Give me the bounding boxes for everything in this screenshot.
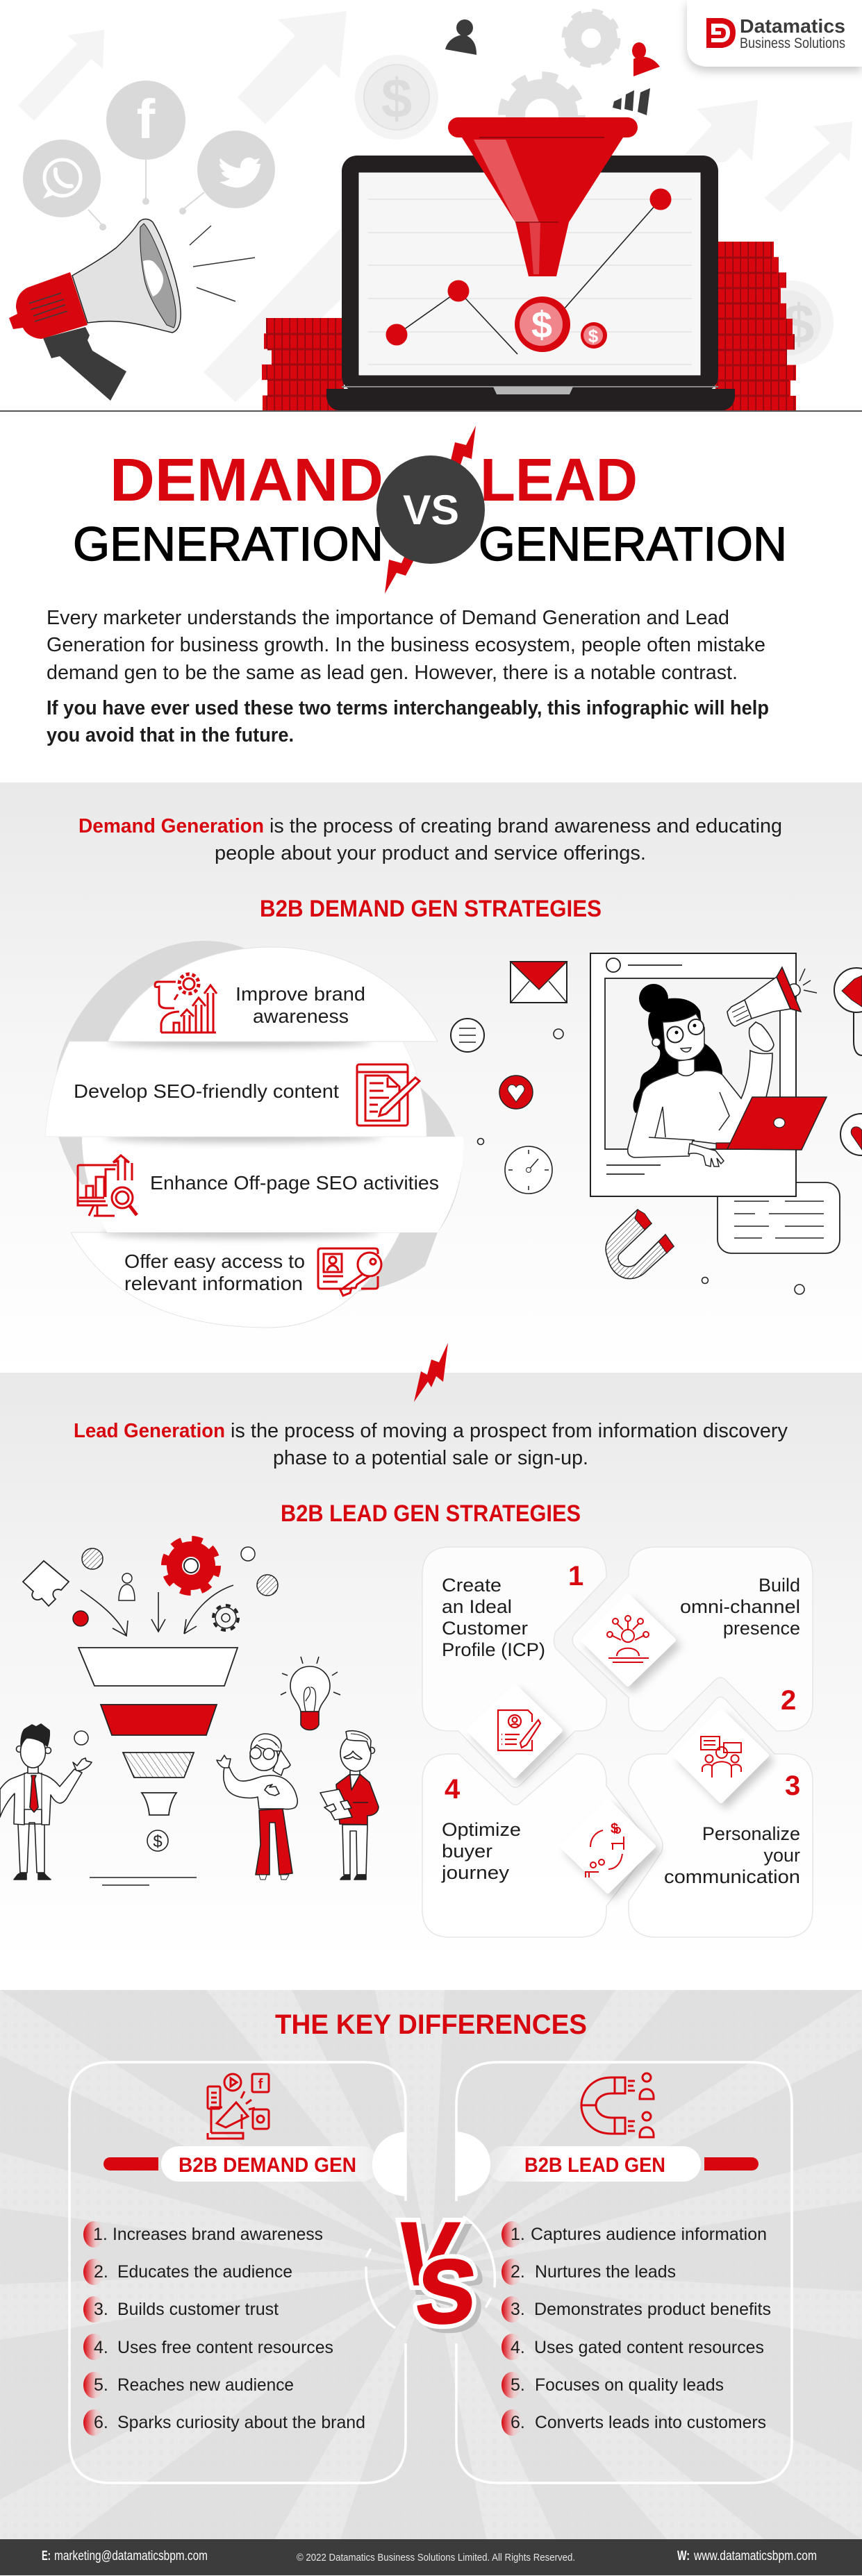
strategy 3 (78, 1132, 463, 1232)
icon: megaphone (9, 219, 255, 401)
icon: heart circle (499, 1076, 533, 1109)
heading: generation left: GENERATION (73, 517, 383, 571)
footer: E: (42, 2549, 51, 2564)
social post illustration (590, 953, 827, 1196)
heading: lead: LEAD (480, 446, 638, 514)
hero illustration (0, 11, 862, 412)
definition text: people about your product and service offerings. (215, 842, 646, 864)
lightning bolt (385, 426, 476, 594)
social icon: facebook (106, 81, 185, 205)
heading: THE KEY DIFFERENCES (275, 2009, 587, 2040)
item 1 (83, 2221, 323, 2248)
funnel illustration (0, 1539, 379, 1885)
item 3: Demonstrates product benefits (534, 2300, 771, 2319)
logo badge (687, 0, 862, 67)
item 1: Increases brand awareness (113, 2225, 323, 2244)
vs emblem: S (417, 2245, 486, 2347)
icon: logo mark (706, 18, 736, 48)
icon: menu circle (451, 1019, 484, 1052)
label pill: B2B DEMAND GEN (179, 2154, 356, 2177)
line chart on laptop (386, 189, 671, 354)
card 2 (572, 1547, 813, 1731)
dollar coin (147, 1830, 168, 1851)
light bulb (281, 1657, 340, 1730)
strategy 4: Offer easy access to (124, 1251, 305, 1272)
item 6: 6. (94, 2413, 108, 2432)
diamond: team chat icon (675, 1711, 767, 1801)
character: woman with megaphone (628, 984, 772, 1166)
strategy 4 (71, 1228, 400, 1328)
laptop (326, 156, 735, 410)
item 1: Captures audience information (531, 2225, 767, 2244)
heading: generation right: GENERATION (479, 517, 787, 571)
strategy 4: relevant information (124, 1273, 303, 1294)
strategy 2: Develop SEO-friendly content (74, 1080, 339, 1102)
big dollar coin (515, 296, 570, 352)
card 3: 3 (785, 1771, 800, 1801)
item 4: Uses gated content resources (534, 2338, 764, 2357)
title block (73, 426, 787, 594)
panel: key differences (0, 1990, 862, 2539)
intro paragraph: demand gen to be the same as lead gen. However, there is a notable contrast. (47, 662, 738, 684)
card 4: journey (441, 1862, 510, 1883)
diamond: network icon (583, 1596, 674, 1684)
item 2: 2. (511, 2262, 525, 2282)
intro paragraph: you avoid that in the future. (47, 724, 294, 746)
vs emblem: S (412, 2241, 481, 2342)
funnel layers (78, 1648, 238, 1815)
strategy 1 (108, 947, 438, 1042)
card 3: communication (664, 1866, 800, 1887)
item 1 (502, 2221, 767, 2248)
item 4 (83, 2334, 333, 2360)
half circle (456, 2132, 490, 2196)
character: old man with clipboard (320, 1731, 379, 1880)
card 1: an Ideal (442, 1596, 512, 1617)
big dollar coin: $ (531, 304, 552, 346)
item 3: 3. (511, 2300, 525, 2319)
vs badge (376, 455, 485, 564)
social icon: facebook: f (137, 88, 156, 150)
item 3 (83, 2296, 279, 2323)
icon: lead magnet (581, 2073, 654, 2137)
strategy cards (422, 1547, 813, 1937)
card 2: presence (723, 1618, 800, 1639)
pale dollar coins (355, 55, 834, 365)
card 2: omni-channel (680, 1596, 800, 1617)
footer (0, 2539, 862, 2575)
item 1: 1. (93, 2225, 108, 2244)
intro paragraph (47, 607, 769, 746)
strategy 2 (45, 1037, 426, 1137)
gears (503, 12, 618, 154)
item 4: 4. (94, 2338, 108, 2357)
definition text (74, 1420, 788, 1469)
item 5: 5. (94, 2375, 108, 2395)
note box (718, 1182, 840, 1253)
icon: red gear (165, 1539, 217, 1592)
vs badge: VS (403, 487, 459, 533)
strategy 1: awareness (253, 1005, 349, 1027)
card 1: Profile (ICP) (442, 1639, 545, 1660)
vs emblem: V (389, 2205, 463, 2304)
pale dollar coins: $ (381, 67, 412, 129)
puzzle piece (23, 1561, 69, 1606)
vs emblem (366, 2205, 495, 2347)
item 6: Sparks curiosity about the brand (117, 2413, 365, 2432)
small dollar coin (581, 322, 607, 349)
icon: brand awareness (155, 974, 217, 1032)
intro paragraph: If you have ever used these two terms interchangeably, this infographic will help (47, 697, 769, 719)
icon: digital marketing (208, 2074, 269, 2139)
item 4: Uses free content resources (117, 2338, 333, 2357)
column: demand gen (69, 2062, 406, 2483)
item 6 (502, 2409, 766, 2436)
card 3: Personalize (702, 1823, 800, 1844)
definition text: phase to a potential sale or sign-up. (273, 1447, 588, 1469)
icon: clock (505, 1146, 552, 1194)
strategy 3: Enhance Off-page SEO activities (150, 1172, 439, 1194)
red laptop (716, 1097, 827, 1150)
item 5 (502, 2372, 724, 2398)
card 4: Optimize (442, 1819, 521, 1840)
right edge icons (834, 968, 862, 1155)
item 4: 4. (511, 2338, 525, 2357)
footer: W: (677, 2549, 690, 2564)
coin stack right (715, 242, 796, 411)
card 1 (422, 1547, 606, 1787)
strategy 1: Improve brand (235, 983, 365, 1005)
small person (119, 1573, 135, 1600)
definition text: is the process of moving a prospect from information discovery (231, 1420, 788, 1442)
label pill (103, 2146, 379, 2182)
list: demand items (83, 2221, 365, 2436)
arrows into funnel (81, 1585, 233, 1636)
card 4: buyer (442, 1841, 492, 1862)
dollar coin: $ (153, 1832, 163, 1851)
intro paragraph: Generation for business growth. In the business ecosystem, people often mistake (47, 634, 765, 656)
logo badge: Datamatics (740, 15, 845, 37)
item 1: 1. (511, 2225, 525, 2244)
icon: person dark (445, 19, 476, 55)
list: lead items (502, 2221, 771, 2436)
item 6 (83, 2409, 365, 2436)
definition text: is the process of creating brand awareness and educating (270, 815, 782, 837)
pale dollar coins: $ (784, 293, 814, 355)
icon: seo content (357, 1064, 420, 1126)
social icon: twitter (179, 131, 275, 215)
coin stack left (262, 318, 344, 411)
item 3: Builds customer trust (117, 2300, 279, 2319)
funnel (448, 117, 638, 276)
diamond: buyer journey icon (562, 1801, 654, 1891)
small dollar coin: $ (588, 326, 599, 346)
definition text: Lead Generation (74, 1420, 225, 1442)
background rays (0, 1990, 862, 2539)
heading: demand: DEMAND (110, 446, 383, 514)
card 2: 2 (781, 1685, 796, 1716)
card 2: Build (759, 1575, 800, 1596)
baseline (0, 410, 862, 412)
lightning bolt (414, 1343, 448, 1402)
card 1: Create (442, 1575, 502, 1596)
footer: © 2022 Datamatics Business Solutions Limited. All Rights Reserved. (297, 2552, 575, 2564)
item 3: 3. (94, 2300, 108, 2319)
item 3 (502, 2296, 771, 2323)
definition text: Demand Generation (78, 815, 264, 837)
diamond: buyer journey icon: $ (611, 1821, 618, 1837)
item 2: 2. (94, 2262, 108, 2282)
item 2 (83, 2259, 292, 2285)
icon: magnet (606, 1210, 674, 1279)
strategy stack (45, 941, 463, 1328)
footer: marketing@datamaticsbpm.com (54, 2549, 208, 2564)
card 4 (422, 1754, 649, 1937)
item 6: Converts leads into customers (535, 2413, 766, 2432)
icon: id key (318, 1248, 381, 1296)
logo badge: Business Solutions (740, 35, 845, 51)
decor circles (73, 1547, 278, 1745)
footer: www.datamaticsbpm.com (693, 2549, 817, 2564)
item 2: Nurtures the leads (535, 2262, 676, 2282)
small gear (213, 1605, 238, 1630)
card 3: your (763, 1845, 800, 1866)
social icon: whatsapp (23, 140, 106, 231)
icon: bars (613, 88, 650, 115)
label pill (486, 2146, 759, 2182)
card 4: 4 (445, 1774, 461, 1805)
diamond: profile icon (469, 1686, 561, 1776)
background arrows (18, 11, 852, 402)
item 5: Focuses on quality leads (535, 2375, 724, 2395)
item 5 (83, 2372, 294, 2398)
vs emblem: V (395, 2210, 468, 2309)
card 1: 1 (568, 1561, 583, 1591)
item 5: Reaches new audience (117, 2375, 294, 2395)
item 4 (502, 2334, 764, 2360)
icon: person red (632, 42, 660, 76)
vs emblem: S (412, 2241, 481, 2342)
card 3 (629, 1697, 813, 1937)
intro paragraph: Every marketer understands the importance of Demand Generation and Lead (47, 607, 729, 629)
icon: seo analytics (78, 1155, 137, 1216)
column: lead gen (456, 2062, 792, 2483)
heading: B2B DEMAND GEN STRATEGIES (260, 896, 602, 922)
item 5: 5. (511, 2375, 525, 2395)
panel: demand generation (0, 783, 862, 1373)
icon: envelope (511, 962, 567, 1003)
character: woman (217, 1734, 297, 1880)
vs emblem: V (389, 2205, 463, 2304)
label pill: B2B LEAD GEN (524, 2154, 665, 2177)
panel: lead generation (0, 1343, 862, 1963)
definition text (78, 815, 782, 864)
item 2 (502, 2259, 676, 2285)
heading: B2B LEAD GEN STRATEGIES (281, 1500, 581, 1527)
character: man left (0, 1724, 92, 1880)
item 2: Educates the audience (117, 2262, 292, 2282)
item 6: 6. (511, 2413, 525, 2432)
held megaphone (727, 967, 817, 1051)
half circle (372, 2132, 406, 2196)
small circles (478, 1029, 804, 1294)
icon: digital marketing: f (258, 2077, 263, 2092)
card 1: Customer (442, 1618, 528, 1639)
